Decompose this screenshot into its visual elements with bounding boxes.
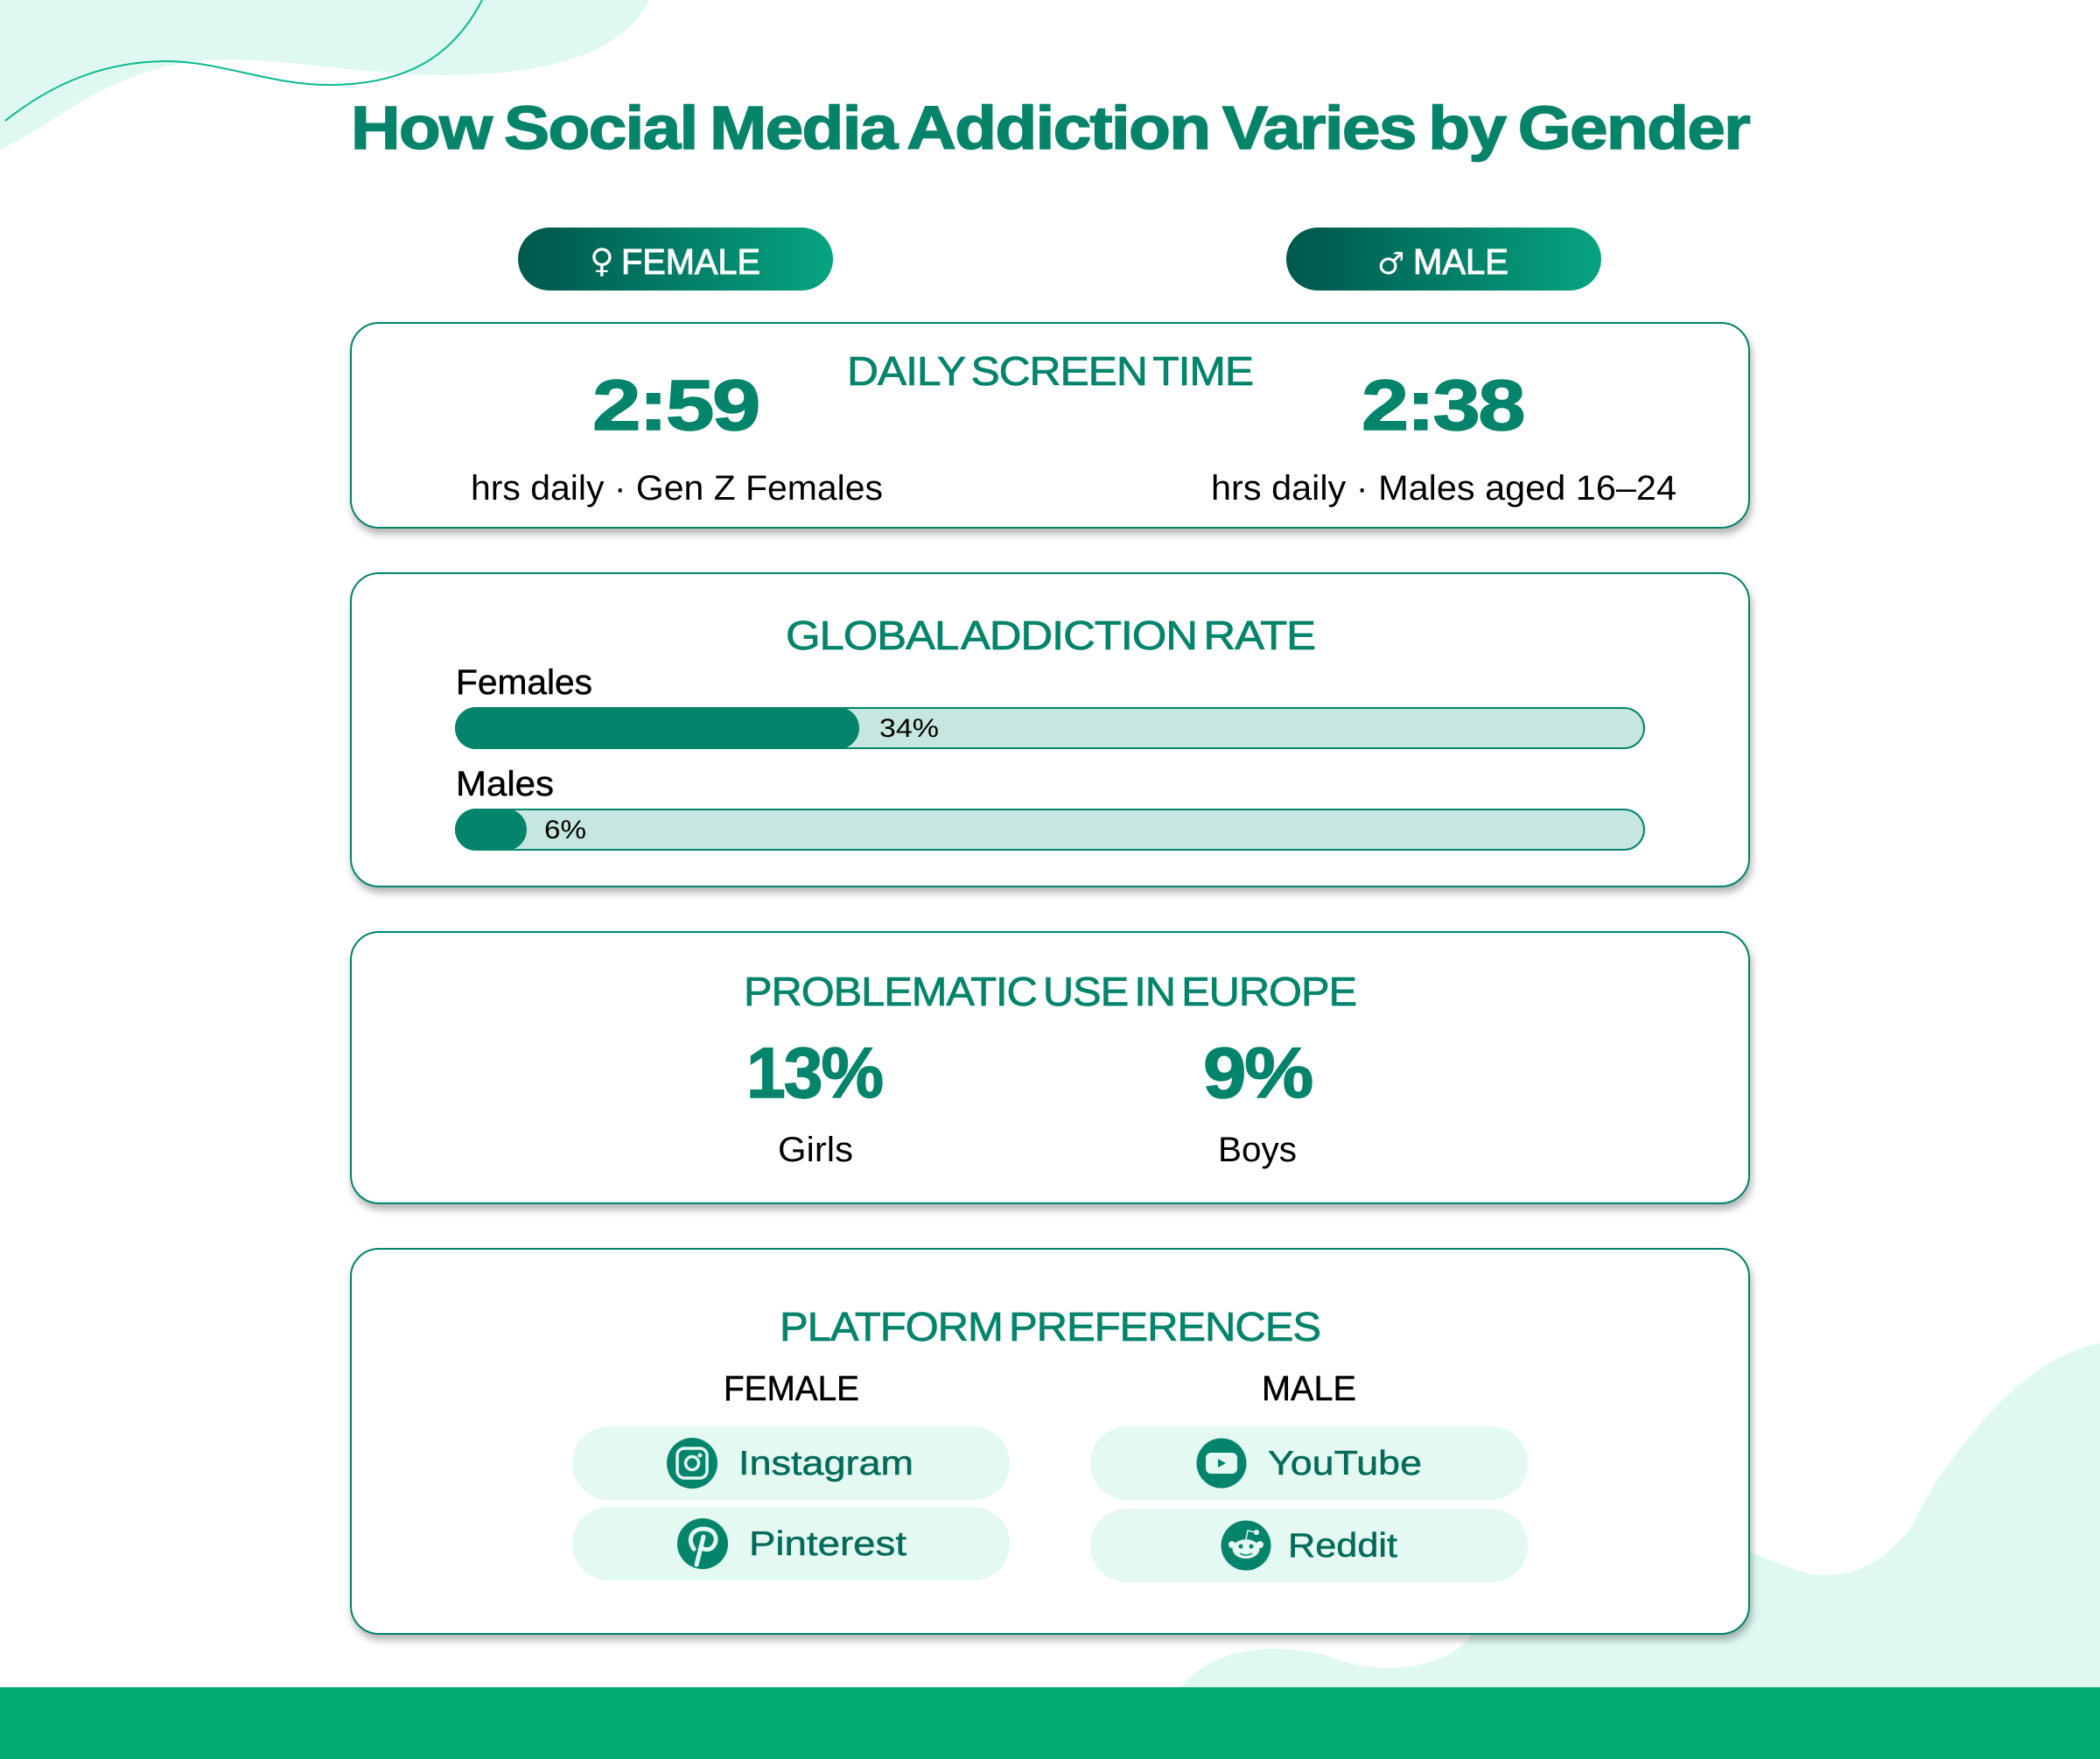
stat: female screen time: 2:59	[592, 366, 759, 445]
caption: male screen time: hrs daily · Males aged 16–24	[1211, 469, 1676, 508]
pill: female: FEMALE	[621, 242, 760, 282]
footer bar	[0, 1687, 2100, 1759]
pill: male	[1286, 228, 1601, 291]
column label: female: FEMALE	[724, 1370, 859, 1408]
caption: female screen time: hrs daily · Gen Z Females	[471, 469, 883, 508]
stat: boys 9%: 9%	[1203, 1034, 1312, 1113]
label: females: Females	[456, 663, 592, 702]
label: boys: Boys	[1218, 1131, 1297, 1169]
title: How Social Media Addiction Varies by Gender	[351, 94, 1750, 162]
pill: male: ♂	[1377, 247, 1404, 282]
platform pill: YouTube	[1090, 1426, 1528, 1500]
platform pill: Reddit: Reddit	[1288, 1527, 1397, 1565]
bar: males 6%	[455, 809, 1644, 851]
heading: global addiction rate: GLOBAL ADDICTION RATE	[786, 613, 1315, 658]
background blob: bottom right	[1180, 1343, 2100, 1687]
panel: platform preferences	[351, 1249, 1749, 1634]
stat: male screen time: 2:38	[1362, 366, 1523, 445]
platform pill: Pinterest	[572, 1507, 1010, 1580]
column label: male: MALE	[1262, 1370, 1356, 1408]
heading: platform preferences: PLATFORM PREFERENCES	[780, 1304, 1320, 1349]
platform pill: YouTube: YouTube	[1268, 1445, 1422, 1482]
platform pill: Pinterest: Pinterest	[749, 1525, 906, 1563]
pill: female: ♀	[590, 242, 614, 280]
label: girls: Girls	[778, 1131, 853, 1169]
heading: daily screen time: DAILY SCREEN TIME	[847, 348, 1253, 394]
panel: daily screen time	[351, 323, 1749, 528]
bar: males 6%: 6%	[544, 816, 586, 844]
bar: females 34%	[455, 707, 1644, 749]
panel: global addiction rate	[351, 573, 1749, 887]
label: males: Males	[456, 765, 554, 803]
background blob: top left	[0, 0, 649, 150]
platform pill: Instagram: Instagram	[738, 1445, 914, 1482]
pill: female	[518, 228, 833, 291]
stat: girls 13%: 13%	[746, 1034, 882, 1113]
pill: male: MALE	[1413, 242, 1508, 282]
panel: problematic use in Europe	[351, 932, 1749, 1203]
bar: females 34%: 34%	[879, 714, 939, 743]
heading: problematic use: PROBLEMATIC USE IN EUROPE	[744, 969, 1356, 1014]
decorative curve: top left	[5, 0, 482, 121]
platform pill: Instagram	[572, 1426, 1010, 1500]
platform pill: Reddit	[1090, 1509, 1528, 1582]
